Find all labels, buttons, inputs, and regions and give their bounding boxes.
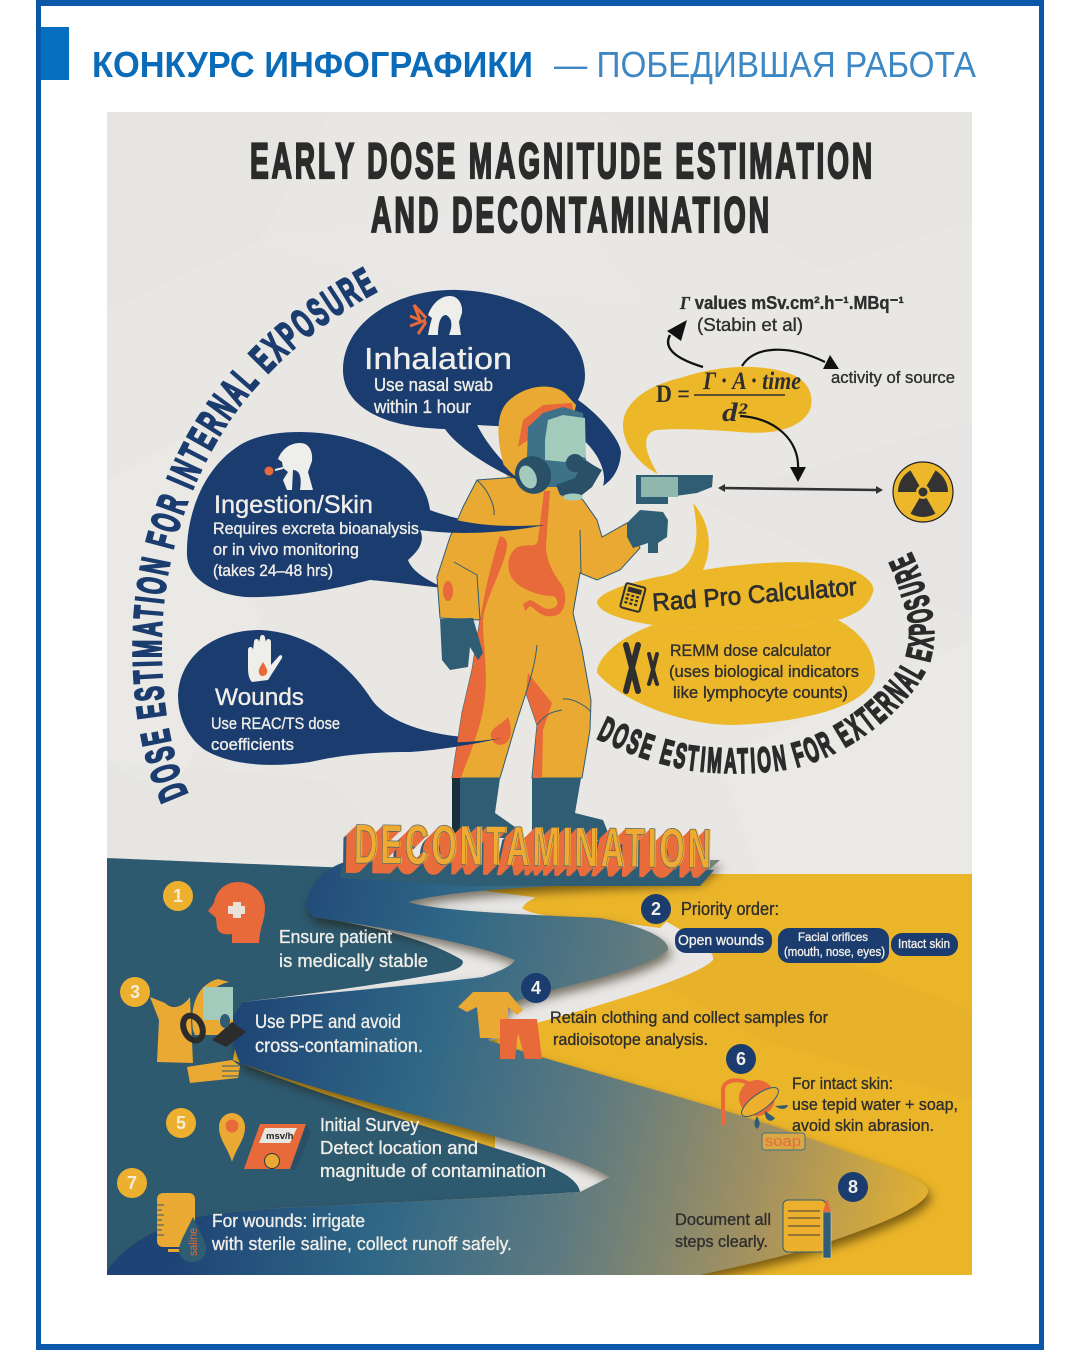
step 3 (120, 977, 423, 1083)
formula (656, 368, 801, 427)
badge 1 (163, 881, 193, 911)
inhalation text: Inhalation (364, 341, 512, 376)
step 6 text: For intact skin: (792, 1074, 893, 1093)
pill: facial orifices: Facial orifices (798, 930, 868, 944)
gamma value note (679, 293, 904, 335)
suit orange knee patch (526, 673, 552, 778)
gamma value note: Γ values mSv.cm².h⁻¹.MBq⁻¹ (679, 293, 904, 313)
bubble tails over suit (400, 425, 545, 750)
step 2 heading: Priority order: (681, 899, 779, 919)
badge 7 (117, 1168, 147, 1198)
remm text (669, 641, 859, 702)
step 3 text (255, 1012, 423, 1057)
step 7 text (211, 1211, 512, 1254)
badge 1: 1 (173, 886, 183, 906)
step 7 (117, 1168, 512, 1262)
remm text: like lymphocyte counts) (673, 683, 848, 702)
icon: ingestion head (264, 443, 313, 490)
icon: calculator (620, 583, 646, 612)
badge 3 (120, 977, 150, 1007)
meter screen (641, 477, 678, 497)
arrow: double-headed distance (718, 484, 883, 494)
step 1 text: Ensure patient (279, 927, 392, 947)
badge 6 (726, 1044, 756, 1074)
badge 6: 6 (736, 1049, 746, 1069)
decontamination lower field (107, 858, 972, 1275)
wounds speech bubble (178, 630, 502, 765)
badge 5 (166, 1108, 196, 1138)
formula bubble (623, 367, 812, 474)
step 1 text: is medically stable (279, 951, 428, 971)
icon: location pin (219, 1113, 245, 1162)
calculator tools bubbles (597, 503, 875, 725)
remm bubble (597, 620, 875, 725)
inhalation text (364, 341, 512, 417)
pill: facial orifices (778, 928, 889, 963)
step 5 (166, 1108, 546, 1181)
step 1 text (279, 927, 428, 971)
survey meter in hand (627, 475, 713, 553)
rad pro bubble (597, 503, 873, 629)
hood (498, 387, 576, 480)
suit orange side strip (452, 536, 507, 778)
step 5 text: magnitude of contamination (320, 1161, 546, 1181)
pill: intact skin (891, 933, 958, 956)
badge 5: 5 (176, 1113, 186, 1133)
poster paper background (107, 112, 972, 882)
inhalation speech bubble (343, 290, 621, 486)
icon: head with cross (208, 882, 265, 943)
step 6 (723, 1044, 958, 1150)
step 4 (458, 973, 828, 1059)
badge 8 (838, 1172, 868, 1202)
soap label: soap (765, 1133, 801, 1150)
ingestion text: (takes 24–48 hrs) (213, 561, 333, 580)
right boot (532, 778, 607, 840)
ingestion text: or in vivo monitoring (213, 540, 359, 559)
step 1 (163, 881, 428, 971)
icon: PPE set (150, 979, 246, 1083)
wound marks (443, 581, 511, 745)
step 4 text: Retain clothing and collect samples for (550, 1008, 828, 1027)
step 7 text: with sterile saline, collect runoff safely. (211, 1234, 512, 1254)
step 8 text (675, 1210, 771, 1251)
header accent block (41, 27, 69, 80)
meter handle and hand (627, 510, 668, 553)
arrow: to activity (742, 350, 839, 369)
gamma value note: (Stabin et al) (697, 315, 803, 335)
arrow: to gamma (667, 320, 703, 367)
step 8 text: Document all (675, 1210, 771, 1229)
step 5 text: Initial Survey (320, 1115, 419, 1135)
ingestion text: Ingestion/Skin (214, 491, 373, 519)
ingestion text: Requires excreta bioanalysis (213, 519, 419, 538)
rad pro label: Rad Pro Calculator (651, 573, 858, 617)
left glove (440, 618, 483, 670)
banner base (340, 866, 714, 886)
step 7 text: For wounds: irrigate (212, 1211, 365, 1231)
meter body (636, 475, 713, 504)
icon: shower (723, 1080, 788, 1129)
wounds text: Wounds (215, 684, 304, 711)
step 3 text: cross-contamination. (255, 1036, 423, 1057)
step 6 text: use tepid water + soap, (792, 1095, 958, 1114)
icon: saline bag (157, 1193, 206, 1262)
curved heading: external exposure: DOSE ESTIMATION FOR EXTERNAL EXPOSURE (596, 552, 935, 774)
step 6 text (792, 1074, 958, 1135)
badge 2: 2 (651, 899, 661, 919)
step 8 (675, 1172, 868, 1258)
icon: hand (248, 635, 282, 682)
icon: radiation trefoil (893, 462, 953, 522)
pill: open wounds: Open wounds (678, 932, 764, 949)
remm text: REMM dose calculator (670, 641, 831, 660)
step 5 text (320, 1115, 546, 1181)
suit seams (454, 480, 591, 725)
header title: КОНКУРС ИНФОГРАФИКИ (92, 44, 533, 85)
icon: clothes (458, 992, 542, 1059)
inhalation text: within 1 hour (373, 397, 471, 417)
pill: intact skin: Intact skin (898, 937, 950, 951)
activity label: activity of source (831, 368, 955, 387)
icon: survey meter: msv/h (266, 1131, 294, 1142)
wounds text: coefficients (211, 735, 294, 754)
badge 4 (521, 973, 551, 1003)
formula: Γ · A · time (702, 368, 801, 395)
step 4 text: radioisotope analysis. (553, 1030, 708, 1049)
pill: facial orifices: (mouth, nose, eyes) (784, 945, 885, 959)
wounds text: Use REAC/TS dose (211, 714, 340, 733)
badge 4: 4 (531, 978, 541, 998)
remm text: (uses biological indicators (669, 662, 859, 681)
header title: — ПОБЕДИВШАЯ РАБОТА (554, 44, 976, 85)
organ: stomach (508, 491, 565, 616)
step 8 text: steps clearly. (675, 1232, 768, 1251)
formula: d² (722, 398, 748, 427)
badge 7: 7 (127, 1173, 137, 1193)
step 3 text: Use PPE and avoid (255, 1012, 401, 1033)
icon: document and pencil (783, 1198, 831, 1258)
figure in protective suit (437, 387, 640, 840)
step 2 (641, 894, 958, 963)
step 4 text (550, 1008, 828, 1049)
suit body (437, 477, 640, 778)
main title (250, 133, 875, 243)
icon: saline bag: saline (186, 1228, 200, 1256)
header title (92, 44, 976, 85)
icon: inhalation head (410, 296, 462, 335)
badge 2 (641, 894, 671, 924)
icon: survey meter (244, 1124, 311, 1170)
step 6 text: avoid skin abrasion. (792, 1116, 934, 1135)
inhalation text: Use nasal swab (374, 375, 493, 395)
main title: AND DECONTAMINATION (371, 187, 772, 243)
formula: D = (656, 381, 690, 408)
decontamination banner: DECONTAMINATION (354, 812, 714, 880)
curved heading: internal exposure: DOSE ESTIMATION FOR INTERNAL EXPOSURE (132, 266, 378, 804)
ingestion speech bubble (187, 432, 545, 597)
wounds text (211, 684, 340, 754)
pill: open wounds (675, 928, 772, 953)
step 5 text: Detect location and (320, 1138, 478, 1158)
ingestion text (213, 491, 419, 580)
gas mask (509, 403, 602, 500)
badge 3: 3 (130, 982, 140, 1002)
arrow: distance (740, 416, 806, 482)
badge 8: 8 (848, 1177, 858, 1197)
icon: chromosomes (626, 645, 657, 691)
left boot (452, 778, 515, 838)
